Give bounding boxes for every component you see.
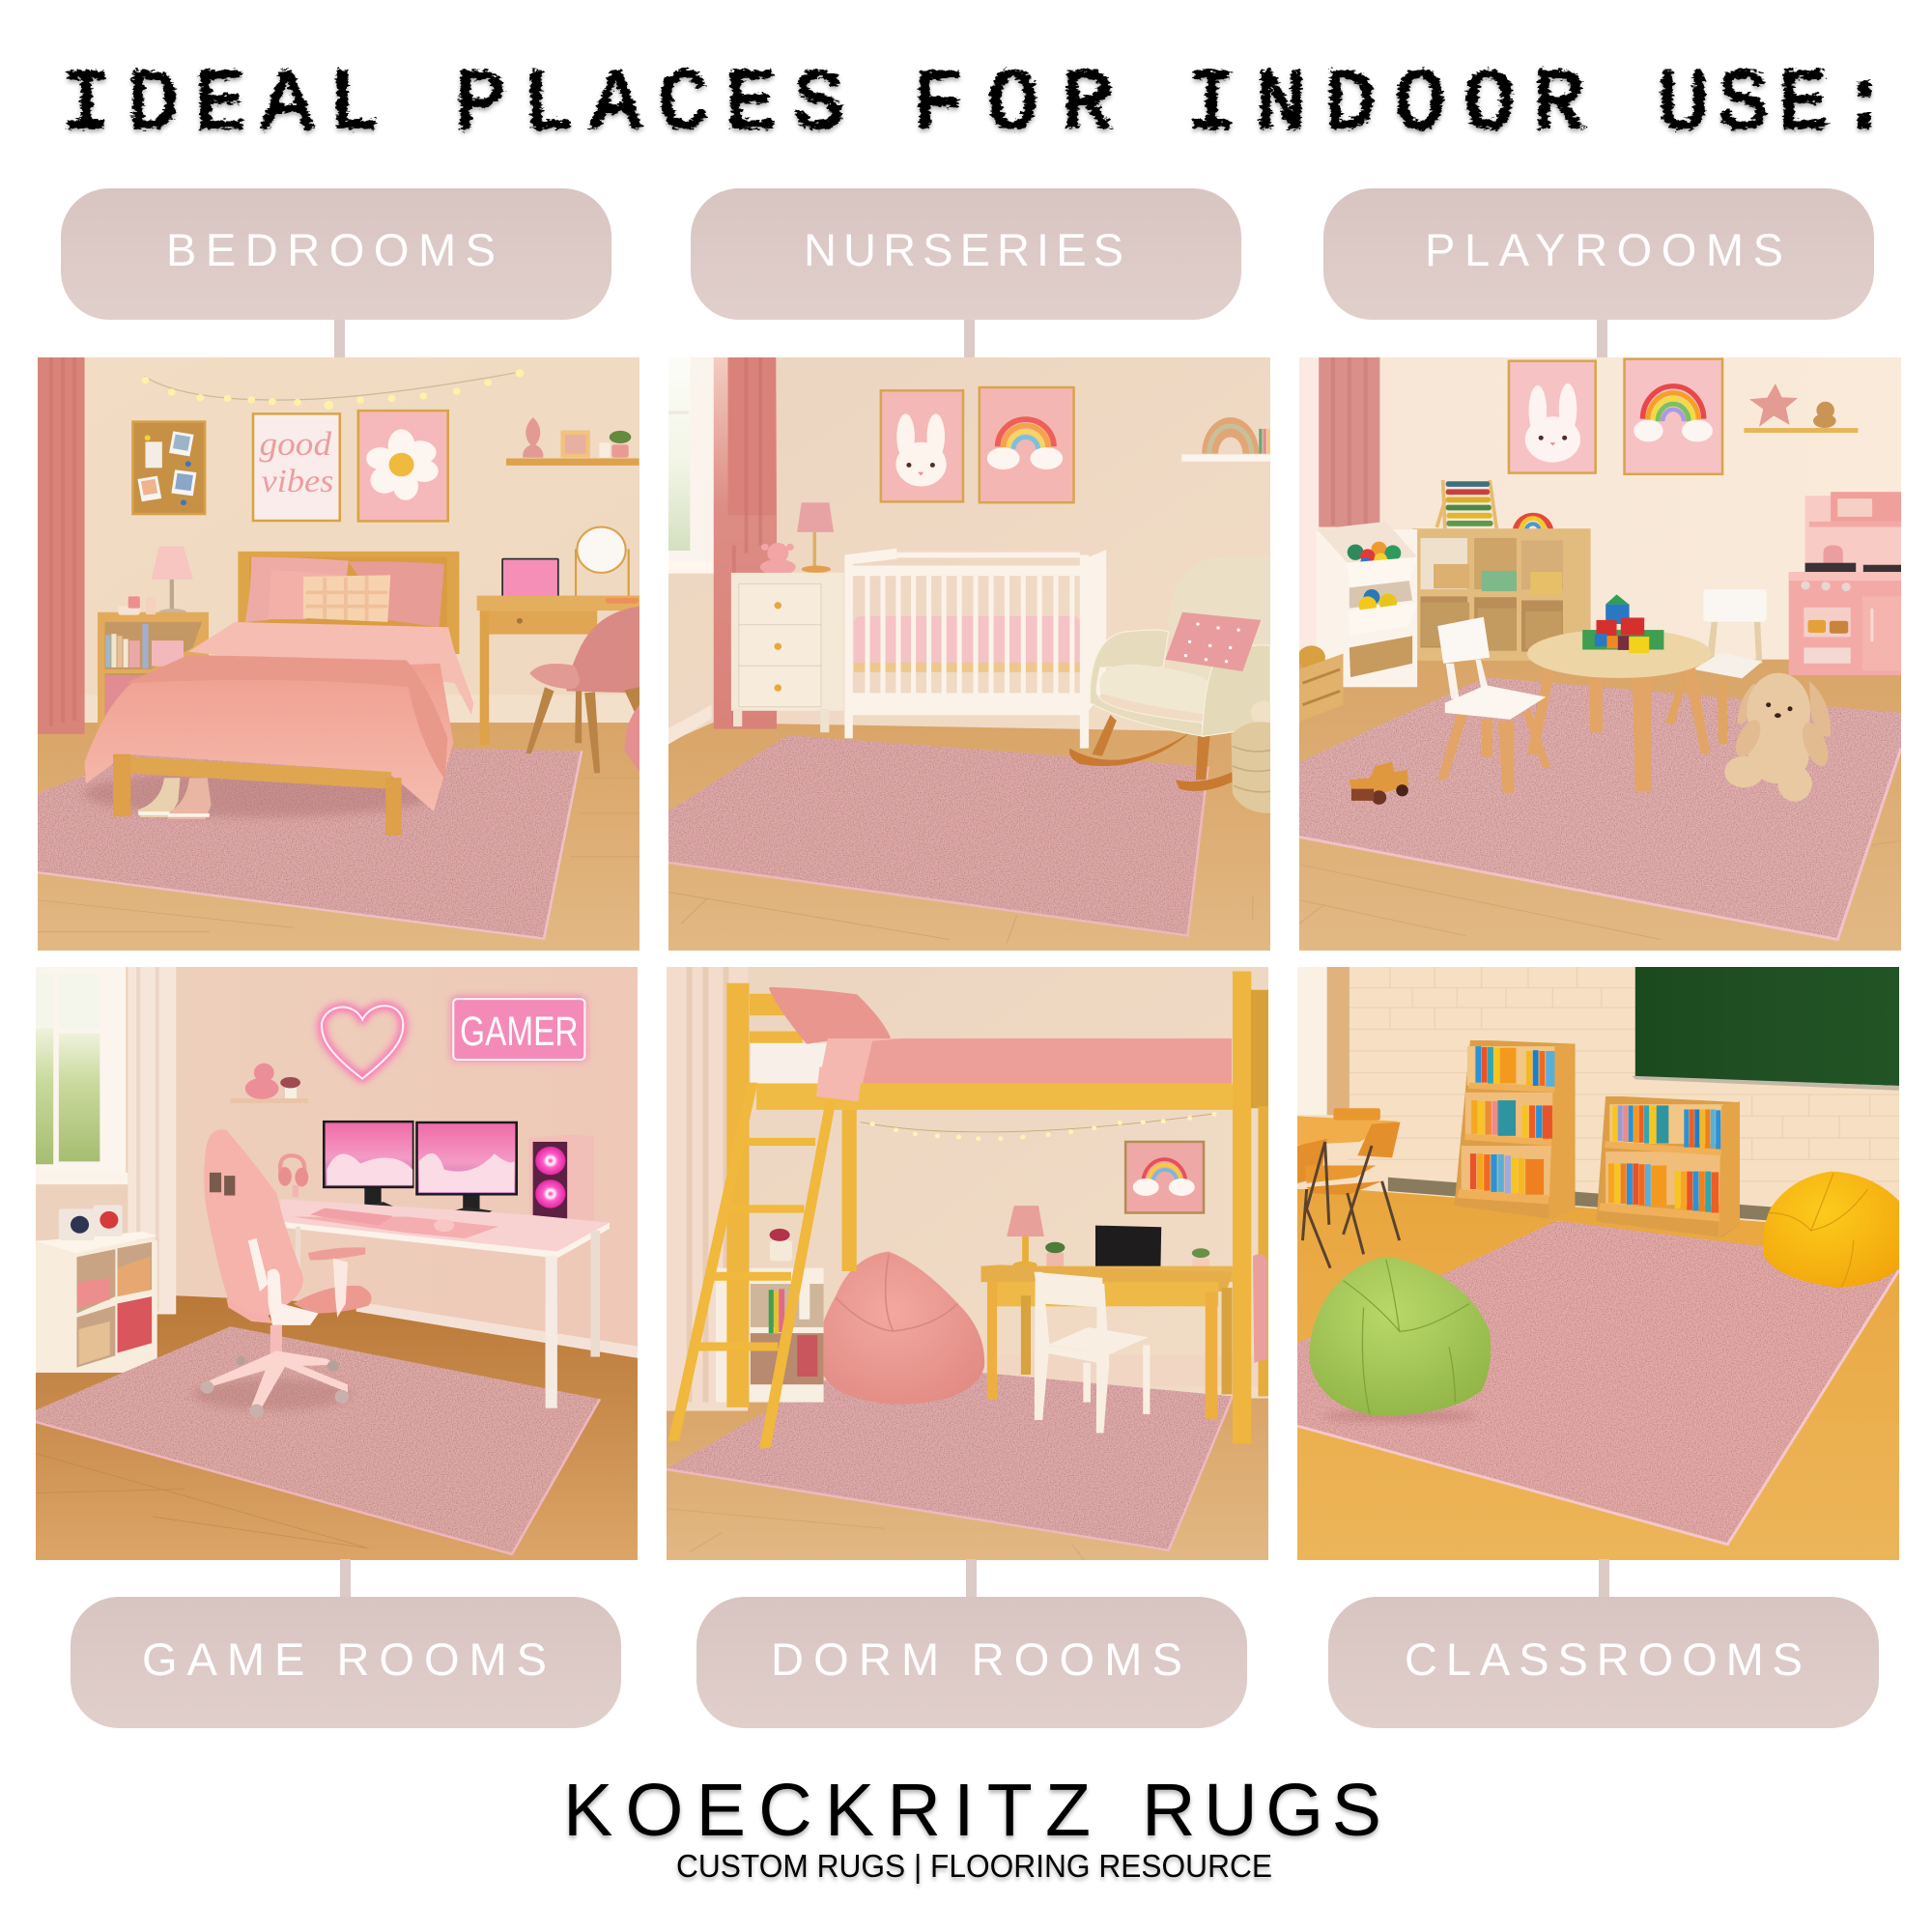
label: nurseries [691,188,1241,358]
desk leg over rug [546,1303,557,1408]
nightstand [98,596,209,724]
label: dorm rooms [696,1559,1247,1728]
panel: game room scene [36,967,638,1560]
woven basket [1232,701,1275,813]
label: classrooms: CLASSROOMS [1405,1634,1803,1685]
rug [667,1373,1233,1550]
wall shelf with teddy [231,1064,308,1103]
panel: dorm room scene [667,967,1268,1560]
gaming chair [200,1129,372,1418]
curtain [38,357,85,734]
curtain [667,967,748,1411]
pink chair [526,607,639,773]
tagline: CUSTOM RUGS | FLOORING RESOURCE [676,1848,1272,1884]
plush bunny [1724,673,1833,802]
rug [1297,1221,1899,1545]
string lights [142,369,524,410]
yellow bean bag [1763,1172,1899,1288]
cork board [132,422,205,514]
title: IDEAL [61,58,380,154]
toy truck [1350,762,1408,805]
desk [981,1264,1233,1419]
headset [278,1155,308,1197]
label: game rooms: GAME ROOMS [142,1634,547,1685]
loft bed frame [726,971,1268,1443]
keyboard and mouse pad [294,1208,498,1238]
rocking chair [1069,557,1270,791]
laptop [1084,1226,1161,1277]
loft rail [756,1084,1233,1110]
bedside lamp [152,547,193,615]
plush teddy [760,543,796,575]
title: INDOOR [1186,58,1584,154]
wall shelf [1181,417,1270,462]
window [668,357,714,574]
table and chairs [1297,1108,1400,1268]
blanket over rail [816,1066,863,1101]
wooden crate with ball [1297,645,1343,722]
poster: good vibes: vibes [262,462,333,499]
panel: classroom scene [1297,967,1899,1560]
plants [1045,1242,1209,1275]
toy rainbow [1516,516,1550,530]
chalkboard [1632,967,1899,1091]
brand name: RUGS [1142,1769,1381,1852]
abacus [1436,480,1496,528]
panel: bedroom scene [38,357,639,951]
desk with laptop and mirror [477,527,639,745]
label: game rooms [71,1559,621,1728]
table lamp [797,502,834,573]
label: dorm rooms: DORM ROOMS [771,1634,1182,1685]
bed [85,552,473,836]
curtain [1319,357,1379,527]
cube shelf with speakers [36,1205,157,1373]
dual monitors [323,1121,518,1216]
neon sign: gamer [452,997,585,1061]
wall shelf with decor [506,417,639,466]
table with blocks [1527,594,1711,791]
panel: nursery scene [668,357,1270,951]
floor planks [668,893,1253,944]
brick pattern [1349,967,1899,1181]
window [36,967,128,1184]
framed rainbow [1125,1142,1204,1213]
crib [844,549,1106,749]
ladder [668,1083,836,1449]
label: playrooms: PLAYROOMS [1425,224,1783,275]
mattress and bedding [751,988,1232,1101]
title: PLACES [455,58,844,154]
gaming pc [528,1135,594,1232]
bookshelf short [1596,1096,1740,1237]
bed shadow on rug [84,770,436,817]
poster: bunny [881,390,963,501]
wall column [1297,967,1350,1115]
rug [668,735,1208,935]
baseboard [1388,1178,1899,1231]
title: USE: [1658,58,1889,154]
neon sign: gamer: GAMER [460,1009,578,1055]
poster: rainbow [980,387,1074,502]
chair shadow on rug [193,1378,352,1410]
poster: daisy [358,411,448,521]
toy bin organiser [1317,522,1417,687]
floor planks [667,1509,1084,1560]
floor planks [36,1454,369,1548]
dresser [731,573,844,732]
panel: playroom scene [1299,357,1901,951]
bookcase [716,1229,824,1403]
label: classrooms [1328,1559,1879,1728]
title: FOR [913,58,1113,154]
brand name: KOECKRITZ [563,1769,1091,1852]
poster: bunny [1509,361,1596,473]
poster: rainbow [1625,359,1722,474]
poster: good vibes: good [260,425,332,463]
label: bedrooms: BEDROOMS [166,224,496,275]
string lights [861,1112,1217,1141]
curtain [714,357,777,729]
sheer curtains [128,967,176,1314]
label: bedrooms [61,188,611,358]
brand name [563,1769,1381,1852]
title [61,58,1889,154]
poster: good vibes [253,413,340,521]
desk lamp [1007,1206,1044,1268]
polka dot pillow [1165,612,1261,671]
cube shelf [1412,528,1591,661]
wall shelf with star and bear [1744,384,1858,433]
label: nurseries: NURSERIES [804,224,1123,275]
front chair [1437,617,1550,793]
green bean bag [1309,1257,1491,1421]
neon heart [322,1006,403,1079]
rug [38,742,582,939]
sneakers [137,778,212,819]
rug [1299,677,1901,940]
toy kitchen [1789,492,1901,675]
hanging throw [1253,1254,1267,1363]
bookshelf tall [1454,1040,1576,1219]
back chair [1665,589,1767,744]
rug [36,1326,600,1554]
bunny face [1766,702,1793,718]
desk [278,1199,610,1408]
label: playrooms [1323,188,1874,358]
white chair [1034,1272,1150,1433]
bean bag [817,1252,984,1405]
